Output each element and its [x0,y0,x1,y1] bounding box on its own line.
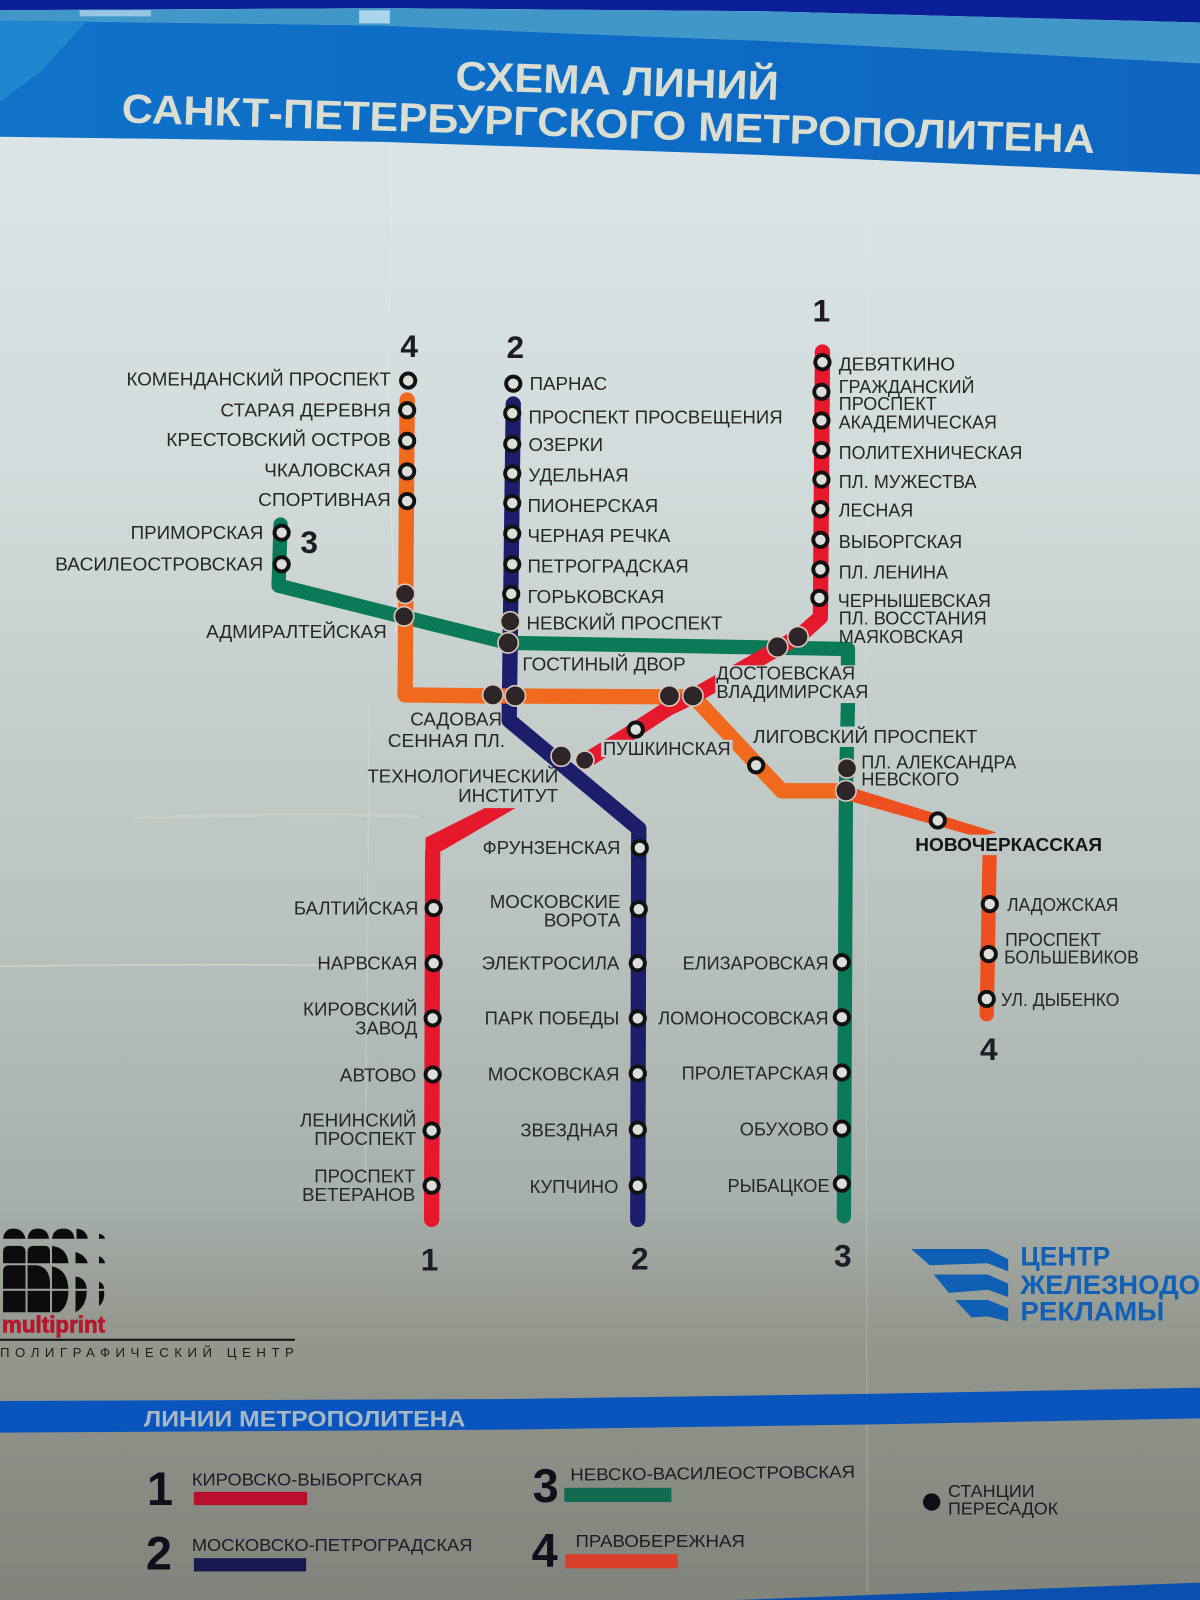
station labels: line 4 north and line 3 west: ПРИМОРСКАЯ [131,522,263,543]
wordmark: ЦЕНТР [1020,1241,1110,1271]
station labels: line 1 north [838,353,1022,647]
legend band [0,1388,1200,1433]
station labels: line 1 south: ВЕТЕРАНОВ [302,1184,415,1205]
title: САНКТ-ПЕТЕРБУРГСКОГО МЕТРОПОЛИТЕНА [121,85,1096,162]
line numbers [300,292,998,1277]
line numbers: 2 [631,1240,649,1276]
station labels: line 4 north and line 3 west: СТАРАЯ ДЕРЕВНЯ [220,399,391,420]
station labels: line 1 south: КИРОВСКИЙ [303,998,417,1019]
station labels: line 3 south: ЛОМОНОСОВСКАЯ [658,1007,829,1028]
station labels: line 1 south: АВТОВО [340,1065,416,1086]
station labels: line 1 north: ПЛ. ЛЕНИНА [839,562,949,583]
legend: line 2: 2 [146,1527,172,1579]
station labels: line 1 north: ПРОСПЕКТ [839,393,937,414]
icon: multiprint blocks [3,1229,105,1312]
station labels: line 4 east: ПРОСПЕКТ [1005,929,1101,950]
logo: railway advertising centre [911,1241,1200,1326]
station labels: line 4 east: НОВОЧЕРКАССКАЯ [915,834,1102,855]
station labels: line 4 north and line 3 west: СПОРТИВНАЯ [258,489,391,510]
legend [146,1460,1058,1579]
station labels: line 3 south: ОБУХОВО [740,1119,829,1140]
station labels: line 4 north and line 3 west: АДМИРАЛТЕЙСКАЯ [206,621,387,642]
station labels: line 2 south: ВОРОТА [544,910,621,931]
station labels: line 1 north: ГРАЖДАНСКИЙ [839,376,974,397]
station labels: line 2 south: МОСКОВСКАЯ [488,1064,619,1085]
station labels: line 2 north: ЧЕРНАЯ РЕЧКА [528,525,671,546]
station labels: line 1 south: ЛЕНИНСКИЙ [300,1110,416,1131]
station labels: line 1 south: НАРВСКАЯ [317,952,417,973]
line numbers: 4 [400,328,418,364]
station labels: line 4 north and line 3 west: КРЕСТОВСКИЙ ОСТРОВ [166,429,391,450]
legend: line 4: ПРАВОБЕРЕЖНАЯ [576,1531,745,1551]
bottom edge band [735,1583,1200,1600]
wordmark: ЖЕЛЕЗНОДО [1019,1270,1200,1300]
legend: transfer stations: СТАНЦИИ [948,1481,1035,1501]
station labels: line 3 south [658,952,830,1196]
station labels: centre: НЕВСКОГО [861,769,959,790]
station labels: line 4 north and line 3 west: КОМЕНДАНСКИЙ ПРОСПЕКТ [127,369,391,390]
station labels: line 2 south: ФРУНЗЕНСКАЯ [483,837,620,858]
station labels: line 2 north: ОЗЕРКИ [529,434,603,455]
station labels: line 2 south: ЭЛЕКТРОСИЛА [482,952,620,973]
station labels: line 4 north and line 3 west: ВАСИЛЕОСТРОВСКАЯ [55,553,263,574]
station labels: line 2 north: ПАРНАС [530,373,607,394]
station labels: line 1 north: ДЕВЯТКИНО [839,353,955,374]
line numbers: 3 [300,524,318,560]
station labels: line 1 north: ПЛ. ВОССТАНИЯ [839,607,987,628]
legend: line 3: 3 [533,1460,559,1512]
station labels: centre: ВЛАДИМИРСКАЯ [716,681,868,702]
station labels: line 1 north: ПЛ. МУЖЕСТВА [839,471,977,492]
legend: transfer stations [923,1481,1058,1518]
line 2 navy [509,404,639,1219]
station labels: line 2 south: ЗВЕЗДНАЯ [520,1120,618,1141]
station labels: line 2 north: ПРОСПЕКТ ПРОСВЕЩЕНИЯ [529,406,783,427]
header banner [0,0,1200,174]
station labels: centre: ДОСТОЕВСКАЯ [716,663,855,684]
station labels: line 2 north: НЕВСКИЙ ПРОСПЕКТ [527,613,722,634]
station labels: line 1 north: ПОЛИТЕХНИЧЕСКАЯ [839,442,1022,463]
station labels: line 1 south: БАЛТИЙСКАЯ [294,897,418,918]
station labels: line 2 north: ПИОНЕРСКАЯ [528,495,658,516]
station labels: line 4 north and line 3 west [55,369,391,642]
station labels: centre: ПУШКИНСКАЯ [603,738,731,759]
station labels: line 2 north: ПЕТРОГРАДСКАЯ [528,555,689,576]
station labels: centre: ТЕХНОЛОГИЧЕСКИЙ [367,766,558,787]
station labels: line 1 south: ПРОСПЕКТ [314,1128,416,1149]
multiprint wordmark: multiprint [2,1312,105,1338]
title: СХЕМА ЛИНИЙ [455,53,780,109]
icon: ribbons [911,1249,1008,1321]
legend: line 4 [532,1524,745,1576]
title [121,53,1096,162]
label clearings [601,665,1104,855]
station labels: line 1 north: МАЯКОВСКАЯ [839,626,963,647]
station labels: line 1 south: ПРОСПЕКТ [314,1166,415,1187]
legend: line 1: 1 [147,1463,173,1515]
legend: line 2: МОСКОВСКО-ПЕТРОГРАДСКАЯ [192,1535,472,1555]
station labels: line 4 east: БОЛЬШЕВИКОВ [1004,946,1139,967]
station labels: line 2 south: КУПЧИНО [530,1176,618,1197]
line 3 green [279,524,848,1216]
legend: line 4: 4 [532,1524,558,1576]
legend: line 3 [533,1460,855,1512]
station labels: line 2 north: ГОРЬКОВСКАЯ [528,586,664,607]
legend: transfer stations: ПЕРЕСАДОК [948,1498,1058,1518]
line numbers: 4 [980,1031,998,1067]
station labels: line 2 south: МОСКОВСКИЕ [490,891,620,912]
wordmark [1019,1241,1200,1326]
station labels: line 3 south: ПРОЛЕТАРСКАЯ [682,1063,829,1084]
line 4 orange [405,400,997,1014]
station labels: centre: САДОВАЯ [410,709,502,730]
line numbers: 2 [507,329,524,365]
station labels: centre [367,653,1017,806]
legend: line 1: КИРОВСКО-ВЫБОРГСКАЯ [192,1470,422,1490]
station labels: line 3 south: ЕЛИЗАРОВСКАЯ [683,952,829,973]
caption: ПОЛИГРАФИЧЕСКИЙ ЦЕНТР [0,1345,294,1360]
station labels: centre: СЕННАЯ ПЛ. [388,730,505,751]
station labels: line 1 north: ВЫБОРГСКАЯ [839,531,962,552]
station labels: centre: ЛИГОВСКИЙ ПРОСПЕКТ [753,726,978,747]
line numbers: 1 [813,292,830,328]
metro lines [279,352,1104,1219]
legend: line 3: НЕВСКО-ВАСИЛЕОСТРОВСКАЯ [570,1462,855,1485]
station labels: line 2 north: УДЕЛЬНАЯ [529,465,629,486]
station labels: line 1 north: ЛЕСНАЯ [839,499,913,520]
legend heading: ЛИНИИ МЕТРОПОЛИТЕНА [144,1407,465,1432]
station labels: line 4 east: УЛ. ДЫБЕНКО [1001,989,1119,1010]
station labels: line 1 south [294,897,418,1205]
wordmark: РЕКЛАМЫ [1020,1296,1164,1326]
transfer stations [394,584,857,801]
station labels: line 3 south: РЫБАЦКОЕ [728,1175,830,1196]
station labels: line 2 south: ПАРК ПОБЕДЫ [485,1007,619,1028]
line numbers: 3 [834,1237,852,1273]
open stations [274,355,997,1193]
station labels: centre: ГОСТИНЫЙ ДВОР [522,653,686,674]
station labels: line 2 south [482,837,621,1197]
station labels: centre: ПЛ. АЛЕКСАНДРА [861,751,1017,772]
station labels: line 1 north: ЧЕРНЫШЕВСКАЯ [838,590,991,611]
station labels: line 4 north and line 3 west: ЧКАЛОВСКАЯ [264,460,391,481]
legend: line 1 [147,1463,422,1515]
logo: multiprint [0,1229,295,1360]
station labels: line 4 east: ЛАДОЖСКАЯ [1007,894,1118,915]
line numbers: 1 [421,1241,438,1277]
station labels: line 4 east [915,834,1139,1010]
station labels: centre: ИНСТИТУТ [458,785,558,806]
station labels: line 1 south: ЗАВОД [355,1018,418,1039]
line 1 red [426,352,822,1219]
station labels: line 2 north [527,373,783,634]
legend: line 2 [146,1527,472,1579]
station labels: line 1 north: АКАДЕМИЧЕСКАЯ [839,412,997,433]
